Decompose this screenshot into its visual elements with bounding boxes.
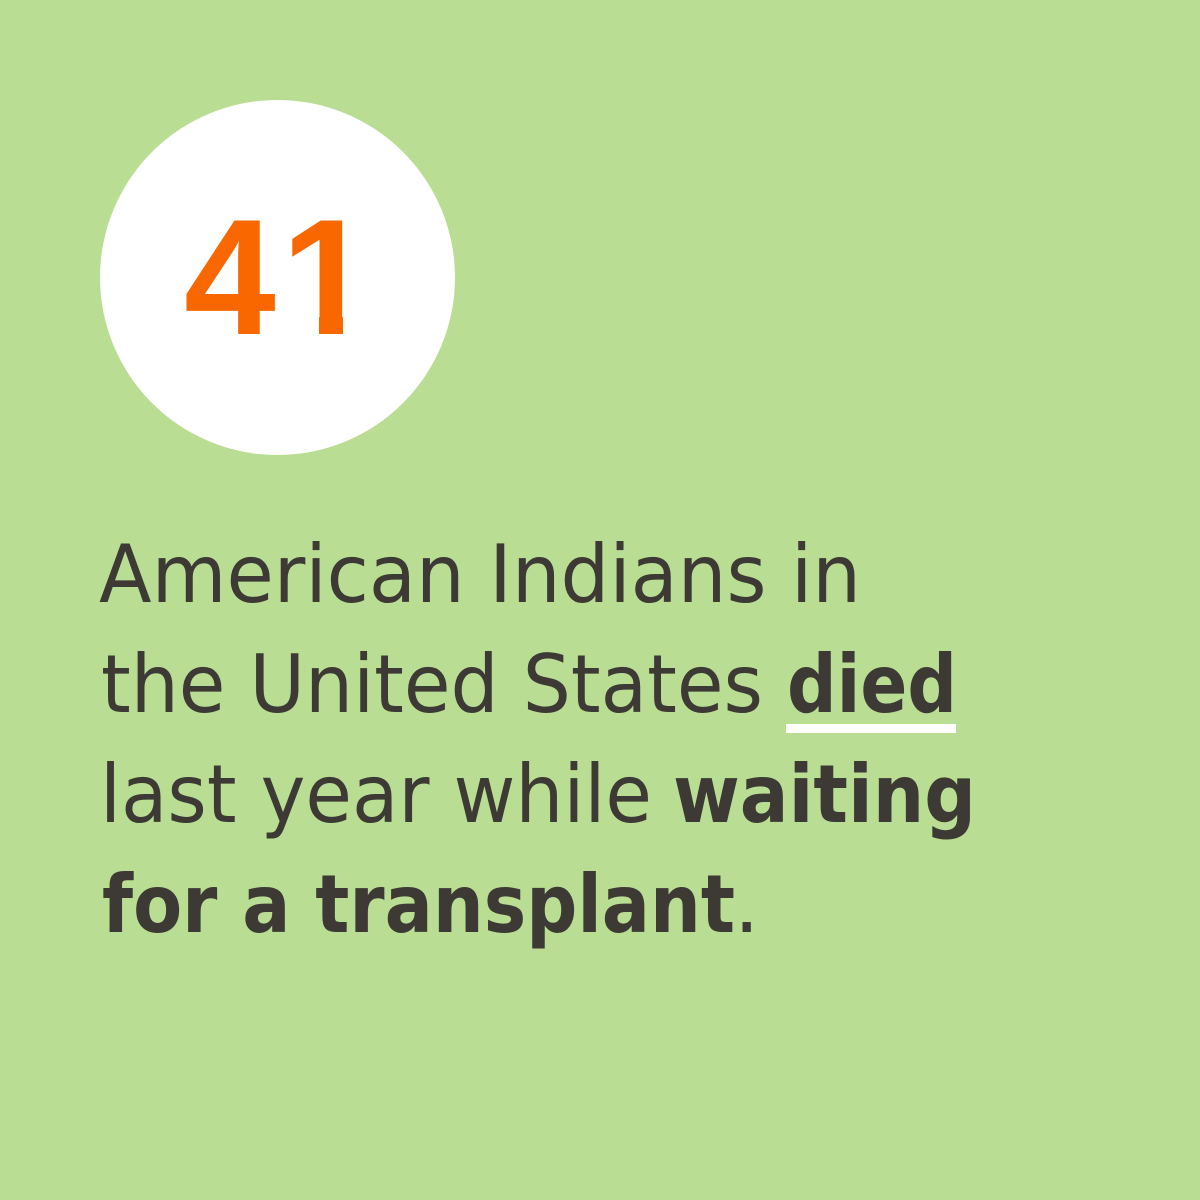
statement text: the United States — [101, 638, 763, 731]
statement text: died — [787, 638, 957, 731]
statement text: American Indians in — [99, 528, 861, 621]
statement text — [99, 528, 976, 951]
underline under died — [786, 724, 956, 733]
statement text: for a transplant — [102, 858, 735, 951]
stat badge: 41 — [100, 100, 455, 455]
statement text: waiting — [673, 748, 976, 841]
stat badge: 41: 41 — [184, 185, 373, 369]
statement text: last year while — [100, 748, 652, 841]
statement text: . — [734, 858, 759, 951]
